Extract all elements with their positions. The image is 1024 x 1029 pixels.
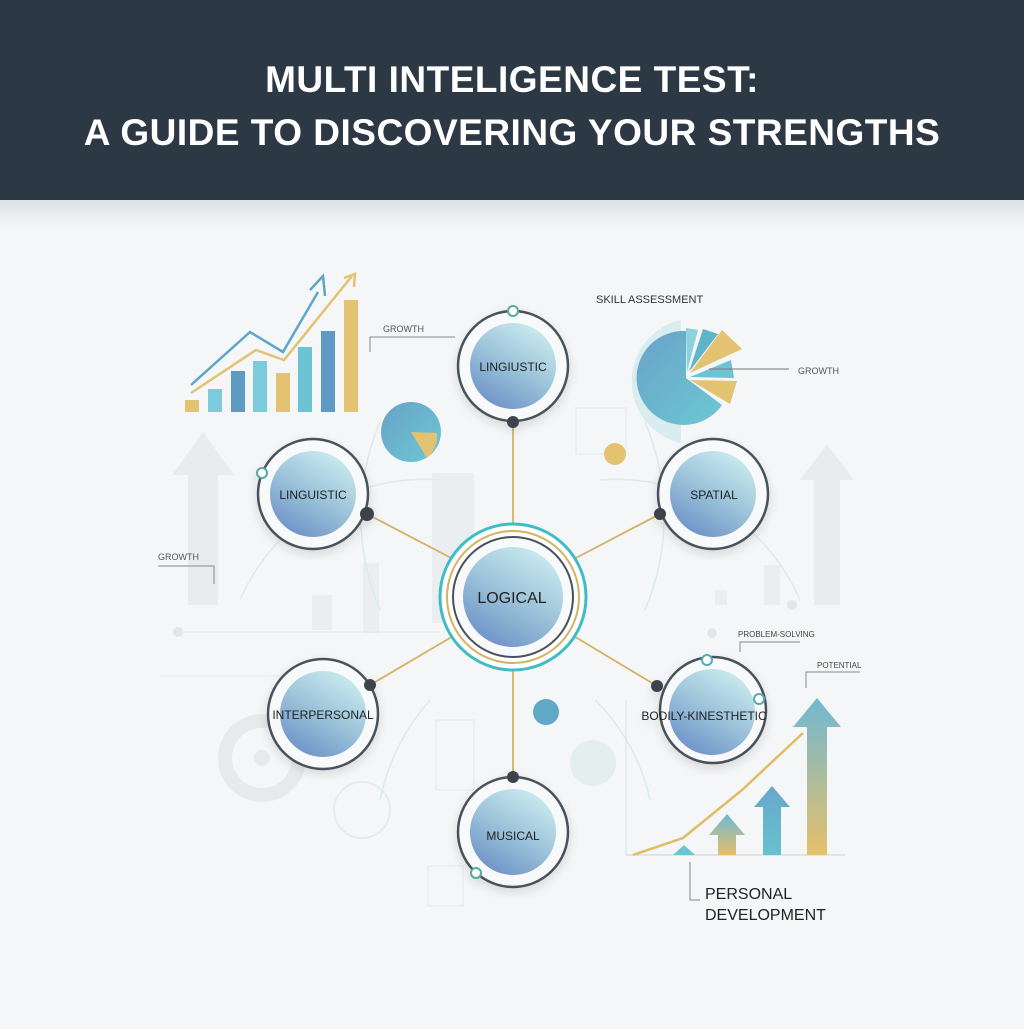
label: growth left bbox=[158, 552, 214, 584]
header: MULTI INTELIGENCE TEST: bbox=[265, 59, 759, 100]
node: spatial: SPATIAL bbox=[690, 488, 738, 502]
label: growth top: GROWTH bbox=[383, 324, 424, 334]
header bbox=[0, 0, 1024, 230]
node: bodily-kinesthetic: BODILY-KINESTHETIC bbox=[641, 709, 767, 723]
personal development chart: DEVELOPMENT bbox=[705, 907, 826, 924]
node: linguistic top: LINGIUSTIC bbox=[479, 360, 547, 374]
labels: problem solving, potential bbox=[738, 630, 862, 688]
center node: logical: LOGICAL bbox=[477, 590, 547, 607]
personal development chart: PERSONAL bbox=[705, 886, 792, 903]
small pie bbox=[381, 402, 441, 462]
label: growth top bbox=[370, 324, 455, 352]
background decorations bbox=[160, 408, 854, 906]
node: musical bbox=[458, 771, 568, 887]
node: interpersonal bbox=[268, 659, 378, 769]
header: A GUIDE TO DISCOVERING YOUR STRENGTHS bbox=[84, 112, 940, 153]
skill assessment pie bbox=[596, 294, 839, 443]
node: musical: MUSICAL bbox=[486, 829, 540, 843]
node: spatial bbox=[654, 439, 768, 549]
labels: problem solving, potential: PROBLEM-SOLVING bbox=[738, 630, 815, 639]
label: growth left: GROWTH bbox=[158, 552, 199, 562]
bar chart top-left bbox=[185, 274, 358, 412]
node: interpersonal: INTERPERSONAL bbox=[272, 708, 374, 722]
skill assessment pie: SKILL ASSESSMENT bbox=[596, 294, 703, 306]
node: linguistic left: LINGUISTIC bbox=[279, 488, 347, 502]
skill assessment pie: GROWTH bbox=[798, 366, 839, 376]
labels: problem solving, potential: POTENTIAL bbox=[817, 661, 862, 670]
personal development chart bbox=[626, 698, 845, 924]
node: linguistic left bbox=[257, 439, 374, 549]
node: linguistic top bbox=[458, 306, 568, 428]
center node: logical bbox=[440, 524, 586, 670]
node: bodily-kinesthetic bbox=[641, 655, 767, 763]
connectors bbox=[367, 422, 660, 777]
